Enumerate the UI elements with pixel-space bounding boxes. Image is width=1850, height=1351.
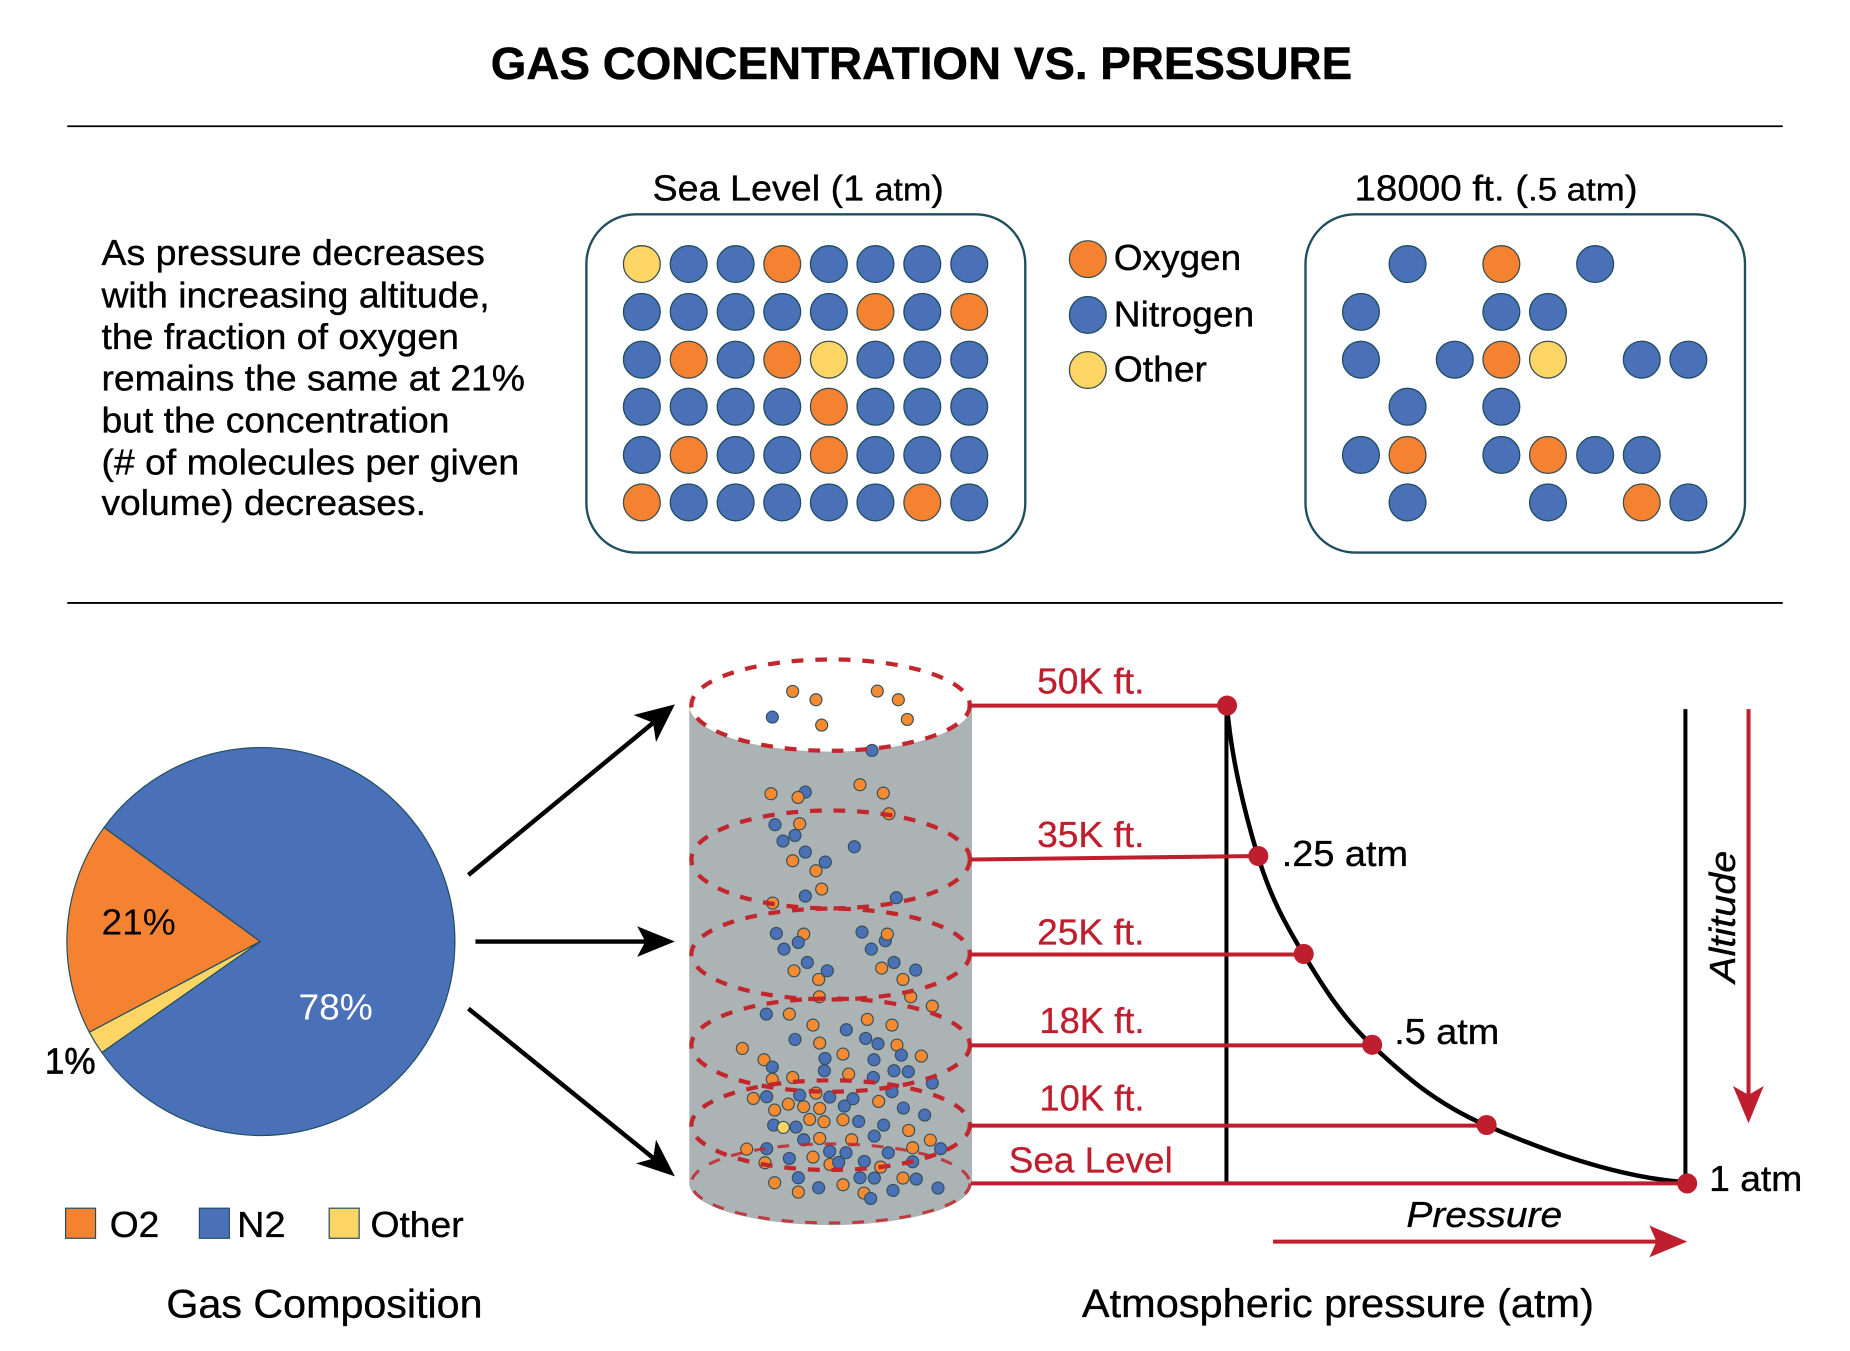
legend: molecules: Nitrogen xyxy=(1114,293,1254,334)
molecules: lower column xyxy=(736,926,947,1204)
text block: explanation: but the concentration xyxy=(101,399,450,440)
arrow: pressure xyxy=(1273,1226,1687,1257)
panel: sea level molecules xyxy=(586,214,1025,553)
dashed altitude rings xyxy=(691,659,970,1223)
label: .5 atm: .5 atm xyxy=(1394,1011,1499,1052)
panel: 18000 ft molecules xyxy=(1306,214,1745,553)
legend: molecules: Other xyxy=(1114,348,1207,389)
altitude line: sea level xyxy=(971,1139,1697,1193)
altitude line: 35K: 35K ft. xyxy=(1037,814,1144,855)
pie chart: gas composition: 21% xyxy=(101,901,176,942)
caption: gas composition: Gas Composition xyxy=(166,1283,483,1327)
heading: 18000 ft panel: 18000 ft. ( .5 atm) xyxy=(1354,168,1638,209)
altitude line: 35K xyxy=(971,814,1268,866)
altitude line: 50K xyxy=(967,660,1237,716)
pie chart: gas composition: 1% xyxy=(45,1041,96,1082)
arrow: pie to sea level xyxy=(468,1009,675,1176)
axis label: altitude: Altitude xyxy=(1702,851,1743,985)
molecules: upper column xyxy=(765,685,913,909)
pressure curve xyxy=(1227,706,1686,1182)
pie chart: gas composition: 78% xyxy=(299,986,373,1027)
text block: explanation: the fraction of oxygen xyxy=(101,316,459,357)
heading: sea level panel: Sea Level (1 atm) xyxy=(652,168,944,209)
label: 1 atm: 1 atm xyxy=(1709,1158,1802,1199)
altitude line: 50K: 50K ft. xyxy=(1037,660,1144,701)
axis: left black vertical xyxy=(1225,706,1228,1182)
text block: explanation: (# of molecules per given xyxy=(101,441,519,482)
legend: molecules: Oxygen xyxy=(1114,237,1241,278)
chart: gas column cylinder xyxy=(689,659,972,1225)
arrow: altitude xyxy=(1733,709,1764,1123)
arrow: pie to mid altitude xyxy=(475,926,675,957)
text block: explanation: volume) decreases. xyxy=(101,482,426,523)
legend: molecules xyxy=(1069,237,1254,389)
altitude line: 25K: 25K ft. xyxy=(1037,911,1144,952)
title: GAS CONCENTRATION VS. PRESSURE xyxy=(491,38,1352,89)
altitude line: 10K: 10K ft. xyxy=(1039,1078,1144,1119)
altitude line: sea level: Sea Level xyxy=(1009,1139,1173,1180)
pie chart: gas composition xyxy=(45,748,455,1136)
altitude line: 18K xyxy=(970,1000,1382,1055)
caption: atmospheric pressure: Atmospheric pressure (atm) xyxy=(1082,1282,1594,1326)
altitude line: 25K xyxy=(970,911,1314,964)
altitude line: 10K xyxy=(970,1078,1497,1135)
altitude line: 18K: 18K ft. xyxy=(1039,1000,1144,1041)
legend: pie chart: O2 xyxy=(110,1204,159,1245)
axis label: pressure: Pressure xyxy=(1406,1194,1562,1235)
text block: explanation: As pressure decreases xyxy=(101,232,485,273)
arrow: pie to 50K xyxy=(468,704,675,875)
text block: explanation: remains the same at 21% xyxy=(101,357,525,398)
legend: pie chart: Other xyxy=(370,1204,464,1245)
text block: explanation: with increasing altitude, xyxy=(100,274,490,315)
text block: explanation xyxy=(100,232,525,523)
legend: pie chart xyxy=(66,1204,464,1245)
label: .25 atm: .25 atm xyxy=(1282,833,1408,874)
legend: pie chart: N2 xyxy=(237,1204,286,1245)
axis: right black vertical xyxy=(1684,709,1687,1182)
